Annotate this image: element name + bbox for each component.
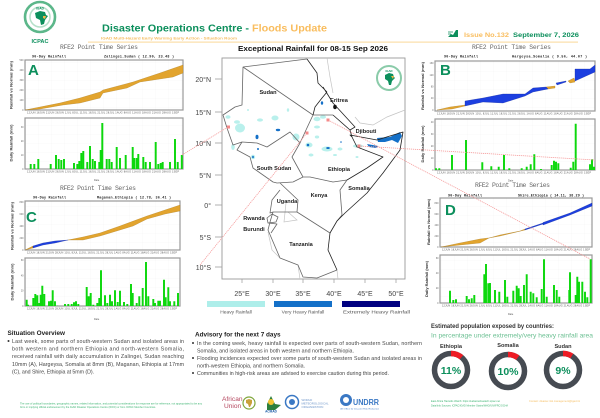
- panel: chart B: RFE2 Point Time Series: [472, 44, 551, 51]
- logo: UNDRR: UN Office for Disaster Risk Reduction: [340, 408, 380, 410]
- map frame and axes: 25°E: [234, 290, 250, 298]
- map frame and axes: 50°E: [388, 290, 404, 298]
- panel: chart A: Rainfall vs Normal (mm): [10, 61, 14, 109]
- panel: chart C: 90-Day Rainfall: [33, 196, 66, 200]
- panel: chart C: 12JUN 18JUN 21JUN 28JUN 1JUL 8JUL 11JUL 18JUL 21JUL 28JUL 1AUG 8AUG 11AUG 18AUG 21AUG 28AUG 1SEP: [27, 308, 177, 310]
- footer links: Contact: disaster.risk.management@igad.int: [529, 400, 580, 403]
- panel: chart B: 80: [431, 86, 434, 88]
- map frame and axes: 5°N: [199, 172, 211, 180]
- legend: Heavy Rainfall: [220, 310, 252, 316]
- panel: chart D: 12JUN 18JUN 21JUN 28JUN 1JUL 8JUL 11JUL 18JUL 21JUL 28JUL 1AUG 8AUG 11AUG 18AUG 21AUG 28AUG 1SEP: [442, 304, 590, 308]
- map frame and axes: 45°E: [357, 290, 373, 298]
- donut: Ethiopia: Ethiopia: [440, 344, 463, 350]
- country labels: Uganda: [277, 199, 298, 205]
- panel: chart B: 10: [431, 157, 434, 160]
- text block: situation overview: received rainfall with daily accumulation in Zalingei, Sudan reaching: [12, 354, 184, 360]
- issue date: September 7, 2026: [513, 32, 579, 39]
- panel: chart C: Maganan_Ethiopia ( 12.78, 36.41 ): [97, 196, 171, 200]
- icon: IGAD ICPAC logo: ICPAC: [32, 39, 48, 45]
- map frame and axes: 10°N: [195, 140, 211, 148]
- panel: chart C: 400: [20, 225, 24, 228]
- panel: chart C: Rainfall vs Normal (mm): [10, 202, 14, 250]
- panel: chart B: Hargeysa_Somalia ( 9.56, 44.07 ): [512, 54, 587, 60]
- footer disclaimer: [20, 402, 203, 409]
- map frame and axes: 40°E: [326, 290, 342, 298]
- panel: chart A: 0: [22, 168, 24, 171]
- panel: chart B: [421, 44, 595, 182]
- panel: chart C: Daily Rainfall (mm): [10, 264, 14, 300]
- logo: African Union: Union: [224, 403, 242, 410]
- panel: chart B: 30: [431, 133, 434, 136]
- map frame and axes: 15°N: [195, 109, 211, 117]
- text block: advisory: Advisory for the next 7 days: [195, 332, 281, 338]
- panel: chart B: Date: [508, 180, 514, 182]
- logo: WMO: ORGANIZATION: [302, 405, 323, 409]
- panel: chart C: 0: [22, 249, 24, 252]
- title: Disaster Operations Centre -: [102, 24, 250, 34]
- issue number: Issue No.132: [464, 32, 509, 39]
- panel: chart C: 20: [21, 290, 24, 293]
- panel: chart C: 12JUN 18JUN 21JUN 28JUN 1JUL 8JUL 11JUL 18JUL 21JUL 28JUL 1AUG 8AUG 11AUG 18AUG 21AUG 28AUG 1SEP: [27, 252, 177, 254]
- panel: chart D: Rainfall vs Normal (mm): [427, 199, 431, 245]
- panel: chart B: 90-Day Rainfall: [444, 54, 478, 60]
- panel: chart B: 0: [432, 169, 434, 172]
- rainfall patches: [226, 101, 402, 159]
- title accent: Floods Update: [252, 24, 327, 34]
- panel: chart D: 20: [436, 287, 439, 290]
- panel: chart A: 12JUN 18JUN 21JUN 28JUN 1JUL 8JUL 11JUL 18JUL 21JUL 28JUL 1AUG 8AUG 11AUG 18AUG 21AUG 28AUG 1SEP: [27, 170, 179, 174]
- text block: advisory: Flooding incidences expected over some parts of south-western Sudan and isolated areas in: [197, 356, 422, 362]
- legend: Extremely Heavy Rainfall: [343, 310, 410, 316]
- logo: UNDRR: [340, 394, 380, 410]
- panel: chart A: 500: [20, 59, 24, 62]
- icon: IGAD ICPAC logo: IGAD: [36, 6, 45, 10]
- text block: situation overview: Last week, some parts of south-western Sudan and isolated areas in: [12, 339, 184, 345]
- donut: Sudan: [546, 344, 580, 386]
- panel: chart A: Date: [94, 179, 100, 182]
- text block: situation overview: (C), and Shire, Ethiopia at 5mm (D).: [12, 370, 94, 376]
- country labels: South Sudan: [257, 166, 292, 172]
- panel: chart C: Date: [94, 318, 100, 321]
- donut: Ethiopia: 11%: [441, 365, 462, 377]
- neighbouring borders: [268, 58, 405, 279]
- footer disclaimer: The use of political boundaries, geographic names, related information, and potential considerations for response are for reference, not appropriated to be any: [20, 402, 203, 406]
- panel: chart A: 300: [20, 79, 24, 82]
- panel: population exposure: [431, 323, 593, 388]
- donut: Somalia: 10%: [497, 366, 519, 378]
- panel: chart D: RFE2 Point Time Series: [475, 182, 550, 189]
- logo: WMO: METEOROLOGICAL: [302, 402, 329, 406]
- logo: ACMAD: [265, 396, 281, 414]
- country labels: Kenya: [311, 193, 328, 199]
- text block: advisory: Somalia, and isolated areas in both western and northern Ethiopia.: [197, 348, 354, 354]
- subtitle: IGAD Multi-Hazard Early Warning Early Action - Situation Room: [101, 36, 237, 40]
- panel: chart A: 90-Day Rainfall: [32, 54, 66, 60]
- footer disclaimer: form or implying official endorsement by the IGAD Disaster Operations Centre (IDOC) or from ICPAC Member Countries.: [20, 405, 156, 409]
- panel: chart D: [425, 182, 592, 316]
- panel: chart D: 0: [437, 302, 439, 305]
- panel: chart B: 20: [431, 145, 434, 148]
- logo: African Union: African: [222, 396, 243, 403]
- icon: map logo: [377, 66, 401, 90]
- header rule: [88, 42, 578, 43]
- chart letter B: B: [440, 62, 451, 79]
- panel: chart B: Daily Rainfall (mm): [421, 126, 425, 162]
- donut: Sudan: 9%: [555, 365, 571, 377]
- panel: chart A: [10, 44, 183, 182]
- panel: chart D: 40: [436, 272, 439, 275]
- panel: chart D: 600: [434, 213, 439, 216]
- text block: advisory: In the coming week, heavy rainfall is expected over parts of south-western Sudan, northern: [197, 341, 422, 347]
- donut: Ethiopia: [434, 344, 468, 386]
- country labels: Burundi: [243, 227, 265, 233]
- panel: chart D: 12JUN 18JUN 21JUN 28JUN 1JUL 8JUL 11JUL 18JUL 21JUL 28JUL 1AUG 8AUG 11AUG 18AUG 21AUG 28AUG 1SEP: [442, 248, 590, 252]
- logo: African Union: [222, 396, 255, 410]
- panel: chart C: 0: [22, 305, 24, 308]
- panel: chart C: 600: [20, 213, 24, 216]
- panel: chart B: 40: [431, 121, 434, 124]
- map frame and axes: 30°E: [265, 290, 281, 298]
- chart letter A: A: [28, 62, 39, 79]
- country borders: [223, 59, 403, 278]
- panel: chart A: 30: [21, 126, 24, 129]
- chart letter C: C: [26, 209, 37, 226]
- panel: chart C: [10, 185, 180, 321]
- footer links: Data/Info Sources: ICPAC/IGAD Member States/WHO/UN/IFRC/OCHA: [431, 404, 508, 408]
- panel: chart A: Zalingei_Sudan ( 12.90, 23.48 ): [104, 54, 174, 60]
- connector lines: [182, 118, 595, 265]
- map frame and axes: 10°S: [196, 264, 211, 272]
- logo: WMO: WORLD: [302, 398, 312, 402]
- panel: chart D: 400: [434, 224, 439, 227]
- panel: chart C: 200: [20, 237, 24, 240]
- country labels: Djibouti: [356, 129, 377, 135]
- map frame and axes: [195, 58, 405, 298]
- text block: situation overview: Situation Overview: [8, 330, 65, 337]
- panel: chart B: 120: [430, 74, 434, 77]
- panel: chart A: RFE2 Point Time Series: [60, 44, 138, 51]
- logo: UNDRR: UNDRR: [353, 398, 379, 407]
- country labels: Somalia: [348, 186, 371, 192]
- panel: population exposure: Estimated population exposed by countries:: [431, 323, 554, 330]
- panel: chart D: Shire_Ethiopia ( 14.11, 38.29 ): [518, 194, 584, 198]
- panel: chart C: 800: [20, 201, 24, 204]
- panel: chart A: 20: [21, 140, 24, 143]
- panel: chart B: 12JUN 18JUN 21JUN 28JUN 1JUL 8JUL 11JUL 18JUL 21JUL 28JUL 1AUG 8AUG 11AUG 18AUG 21AUG 28AUG 1SEP: [437, 112, 591, 116]
- donut: Somalia: Somalia: [497, 343, 520, 349]
- panel: chart A: 100: [20, 99, 24, 102]
- panel: chart A: 0: [22, 109, 24, 112]
- panel: chart A: 10: [21, 154, 24, 157]
- country labels: Ethiopia: [328, 167, 351, 173]
- panel: chart A: 12JUN 18JUN 21JUN 28JUN 1JUL 8JUL 11JUL 18JUL 21JUL 28JUL 1AUG 8AUG 11AUG 18AUG 21AUG 28AUG 1SEP: [27, 112, 179, 114]
- text block: situation overview: [8, 330, 185, 376]
- footer links: [431, 400, 580, 408]
- map frame and axes: 5°S: [200, 234, 211, 242]
- text block: situation overview: both western and northern Ethiopia and north-western Somalia,: [12, 346, 184, 352]
- country labels: Sudan: [259, 90, 277, 96]
- country labels: Rwanda: [243, 216, 266, 222]
- icon: IGAD ICPAC logo: [25, 2, 55, 45]
- map title: Exceptional Rainfall for 08-15 Sep 2026: [238, 44, 388, 53]
- text block: situation overview: 10mm (A), Hargeysa, Somalia at 8mm (B), Maganan, Ethiopia at 17mm: [12, 362, 185, 368]
- donut: Somalia: [492, 343, 524, 388]
- map frame and axes: 0°: [204, 202, 211, 210]
- map frame and axes: 35°E: [295, 290, 311, 298]
- country labels: [243, 90, 377, 248]
- panel: chart D: Date: [508, 313, 514, 316]
- logo: ACMAD: ACMAD: [265, 410, 278, 414]
- panel: population exposure: In percentage under extremely/very heavy rainfall area: [431, 332, 593, 340]
- panel: chart B: Rainfall vs Normal (mm): [421, 62, 425, 110]
- map frame and axes: 20°N: [195, 76, 211, 84]
- legend: [207, 301, 410, 316]
- country labels: Eritrea: [330, 98, 349, 104]
- panel: chart D: 60: [436, 257, 439, 260]
- text block: advisory: Communities in high-risk areas are advised to exercise caution during this period.: [197, 371, 389, 377]
- panel: chart A: 200: [20, 89, 24, 92]
- panel: chart A: 400: [20, 69, 24, 72]
- text block: advisory: [192, 332, 422, 377]
- legend: Very Heavy Rainfall: [282, 310, 324, 316]
- donut: Sudan: Sudan: [554, 344, 572, 350]
- panel: map: [195, 44, 410, 316]
- panel: chart B: 0: [432, 109, 434, 112]
- panel: chart B: 12JUN 18JUN 21JUN 28JUN 1JUL 8JUL 11JUL 18JUL 21JUL 28JUL 1AUG 8AUG 11AUG 18AUG 21AUG 28AUG 1SEP: [437, 172, 591, 174]
- icon: map logo: IGAD: [386, 69, 392, 73]
- panel: chart D: 90-Day Rainfall: [448, 194, 482, 198]
- footer links: East Africa Hazards Watch: https://eahazardswatch.icpac.net: [431, 400, 500, 403]
- country labels: Tanzania: [289, 242, 314, 248]
- panel: chart C: 40: [21, 274, 24, 277]
- panel: chart D: 200: [434, 235, 439, 238]
- panel: chart C: RFE2 Point Time Series: [60, 185, 136, 192]
- panel: chart B: 160: [430, 62, 434, 65]
- text block: advisory: north-western Ethiopia, and northern Somalia.: [197, 364, 305, 370]
- icon: issue chart: [448, 30, 458, 37]
- chart letter D: D: [445, 202, 456, 219]
- panel: chart C: 60: [21, 259, 24, 262]
- panel: chart D: Daily Rainfall (mm): [425, 261, 429, 297]
- panel: chart D: 800: [434, 202, 439, 205]
- panel: chart D: 0: [437, 246, 439, 249]
- panel: chart A: Daily Rainfall (mm): [10, 124, 14, 162]
- panel: chart B: 40: [431, 97, 434, 100]
- logo: WMO: [286, 396, 329, 409]
